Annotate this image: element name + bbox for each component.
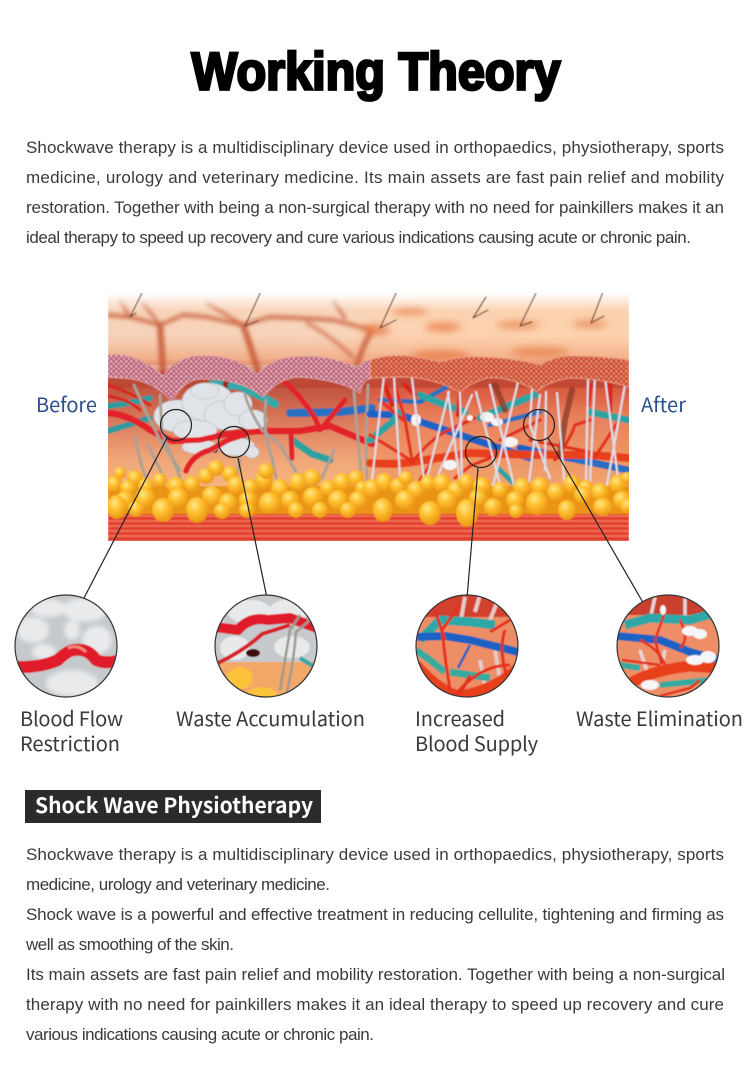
caption: increased blood supply: Blood Supply xyxy=(415,728,539,757)
orange dotted layer: after xyxy=(370,356,629,392)
skin surface xyxy=(108,293,629,375)
label: before: Before xyxy=(36,389,97,418)
fat layer globules xyxy=(106,460,636,527)
artery over the waste xyxy=(180,428,260,474)
section paragraph: medicine, urology and veterinary medicine. xyxy=(26,875,330,894)
section paragraph: various indications causing acute or chronic pain. xyxy=(26,1025,374,1044)
caption: blood flow restriction xyxy=(20,703,123,757)
intro paragraph: Shockwave therapy is a multidisciplinary device used in orthopaedics, physiotherapy, sports xyxy=(26,138,724,157)
thumbnail: blood flow restriction xyxy=(15,595,117,697)
left vessels xyxy=(108,380,372,471)
thumbnail: waste elimination xyxy=(617,595,719,697)
caption: blood flow restriction: Blood Flow xyxy=(20,703,123,732)
section heading bar: Shock Wave Physiotherapy xyxy=(35,790,313,820)
pink dotted layer: before xyxy=(108,355,372,401)
left connective fibres xyxy=(134,385,368,482)
intro paragraph: ideal therapy to speed up recovery and cure various indications causing acute or chronic pain. xyxy=(26,228,691,247)
dermis background xyxy=(80,372,658,497)
callout lines and lens circles xyxy=(84,410,645,606)
callout: waste accumulation xyxy=(218,426,267,598)
callout: blood flow restriction xyxy=(84,410,192,598)
title: Working Theory xyxy=(192,42,561,102)
section paragraph: therapy with no need for painkillers makes it an ideal therapy to speed up recovery and cure xyxy=(26,995,724,1014)
intro paragraph: restoration. Together with being a non-surgical therapy with no need for painkillers makes it an xyxy=(26,198,724,217)
section paragraph xyxy=(25,845,725,1044)
caption: waste elimination: Waste Elimination xyxy=(576,703,743,732)
thumbnail: increased blood supply xyxy=(416,595,518,697)
intro paragraph xyxy=(26,138,724,247)
caption: increased blood supply xyxy=(415,703,539,757)
skin cross-section illustration xyxy=(108,293,629,541)
label: after: After xyxy=(641,389,686,418)
caption: blood flow restriction: Restriction xyxy=(20,728,120,757)
waste remnants: white specks xyxy=(411,412,518,470)
right vessels xyxy=(370,385,628,485)
section paragraph: Shock wave is a powerful and effective treatment in reducing cellulite, tightening and firming as xyxy=(26,905,724,924)
muscle layer stripes xyxy=(108,512,629,541)
waste deposit: white lumps xyxy=(154,383,267,458)
callout: increased blood supply xyxy=(466,436,496,598)
intro paragraph: medicine, urology and veterinary medicine. Its main assets are fast pain relief and mobility xyxy=(26,168,724,187)
right white fibres xyxy=(372,376,625,490)
section paragraph: well as smoothing of the skin. xyxy=(25,935,234,954)
callout: waste elimination xyxy=(524,410,645,606)
section paragraph: Its main assets are fast pain relief and mobility restoration. Together with being a non-surgical xyxy=(26,965,725,984)
dermis top shadow xyxy=(108,372,629,388)
section paragraph: Shockwave therapy is a multidisciplinary device used in orthopaedics, physiotherapy, sports xyxy=(26,845,724,864)
caption: increased blood supply: Increased xyxy=(415,703,505,732)
caption: waste accumulation: Waste Accumulation xyxy=(176,703,365,732)
thumbnail: waste accumulation xyxy=(215,595,317,703)
hairs xyxy=(129,293,605,329)
